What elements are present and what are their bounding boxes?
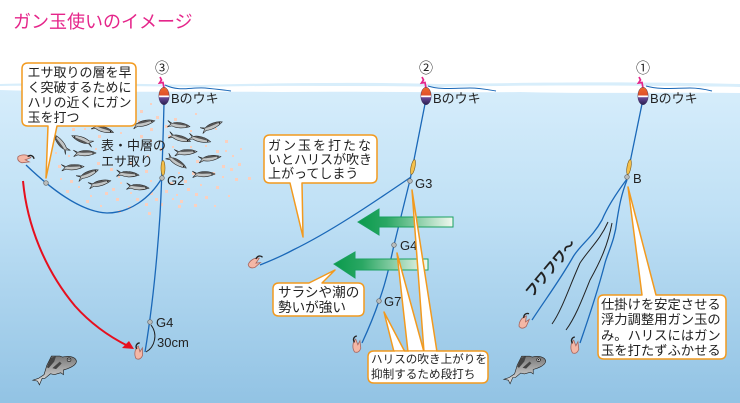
callout body — [368, 351, 488, 383]
rig 1 — [516, 77, 712, 354]
rig 2: G4 shot — [392, 243, 396, 247]
label: G7: G7 — [384, 294, 401, 309]
rig 2: stopper — [409, 159, 417, 175]
callout tail to G7 — [384, 312, 405, 352]
label: B float 1: Bのウキ — [650, 91, 698, 106]
number 1: ① — [636, 60, 650, 76]
rig 2: lower bait — [349, 335, 364, 353]
rig 2: G7 shot — [377, 299, 381, 303]
label: bait layer: エサ取り — [101, 154, 153, 169]
rig 2 — [247, 77, 496, 353]
rig 2: main line — [362, 104, 425, 343]
callout: stable rig: み。ハリスにはガン — [601, 328, 721, 343]
callout: bait layer break — [22, 63, 136, 178]
black sea bream left — [33, 356, 76, 385]
rig 2: upper bait — [247, 255, 265, 269]
rig 1: bait A — [516, 312, 534, 330]
rig 2: hook length — [260, 177, 411, 265]
rig 3: yellow stopper — [161, 160, 165, 176]
rig 3: 30cm bracket — [146, 325, 155, 352]
rig 3: line — [145, 104, 164, 352]
callout: strong current: 勢いが強い — [278, 300, 346, 315]
callout tail to G4 — [397, 253, 424, 352]
rig 1: main line — [627, 104, 642, 177]
rig 1: surface line — [646, 86, 712, 91]
label: B float 3: Bのウキ — [171, 91, 219, 106]
arrow: lower current — [334, 252, 428, 278]
callout: bait layer break: く突破するために — [28, 80, 132, 95]
rig 3: G2 shot — [160, 176, 164, 180]
rig 2: G3 shot — [408, 179, 412, 183]
callout: bait layer break: 玉を打つ — [28, 110, 80, 125]
rig 1: motion line A — [552, 222, 608, 324]
callout: staged shot — [368, 190, 488, 383]
rig 3 — [17, 77, 231, 361]
label: bait layer: 表・中層の — [101, 138, 166, 153]
rig 1: hook length A — [532, 179, 627, 320]
callout: without shot — [264, 135, 377, 237]
callout: bait layer break: エサ取りの層を早 — [28, 65, 132, 80]
callout: staged shot: ハリスの吹き上がりを — [371, 353, 487, 366]
callout: stable rig: 仕掛けを安定させる — [601, 297, 721, 312]
rig 1: hook length B — [580, 180, 627, 343]
number 2: ② — [419, 60, 433, 76]
title: ガン玉使いのイメージ — [13, 12, 193, 32]
rig 3: bait shrimp — [17, 151, 35, 166]
label: G4 rig 3: G4 — [156, 315, 173, 330]
rig 1: bait B — [567, 336, 582, 354]
water background — [0, 82, 740, 403]
callout: without shot: いとハリスが吹き — [268, 152, 372, 167]
label: G3: G3 — [415, 176, 432, 191]
rig 2: surface line — [428, 86, 496, 91]
arrow: upper current — [358, 209, 453, 235]
plankton chum cloud — [55, 103, 251, 215]
rig 2: float — [421, 77, 431, 105]
callout: without shot: 上がってしまう — [268, 166, 358, 181]
school of bait fish — [51, 117, 223, 191]
label: B float 2: Bのウキ — [433, 91, 481, 106]
callout: stable rig — [598, 187, 726, 359]
rig 3: deep bait — [131, 342, 147, 361]
rig 3: float — [159, 77, 169, 105]
callout: bait layer break: ハリの近くにガン — [28, 95, 132, 110]
callout: strong current — [273, 270, 364, 316]
rig 3: surface line — [165, 85, 231, 91]
label: B: B — [633, 171, 642, 186]
callout: stable rig: 浮力調整用ガン玉の — [601, 312, 721, 327]
callout tail to G3 — [412, 190, 437, 352]
rig 3: hook length with bait — [26, 165, 162, 213]
rig 1: stopper — [626, 159, 632, 175]
red arrow — [23, 181, 134, 349]
rig 1: motion line B — [566, 223, 612, 330]
number 3: ③ — [155, 60, 169, 76]
callout: strong current: サラシや潮の — [278, 285, 359, 300]
label: fuwafuwa: フワフワ〜 — [522, 236, 579, 300]
callout: stable rig: 玉を打たずふかせる — [601, 343, 721, 358]
callout: staged shot: 抑制するため段打ち — [371, 367, 475, 381]
black sea bream right — [504, 356, 546, 384]
rig 1: float — [638, 77, 648, 105]
label: G4 rig 2: G4 — [400, 238, 417, 253]
callout: without shot: ガン玉を打たな — [268, 138, 373, 153]
rig 3: shot on hook length — [44, 181, 48, 185]
rig 1: B shot — [625, 175, 629, 179]
label: 30cm: 30cm — [157, 335, 189, 350]
cover tail joins — [395, 352, 436, 354]
rig 3: G4 shot — [148, 320, 152, 324]
label: G2: G2 — [167, 173, 184, 188]
